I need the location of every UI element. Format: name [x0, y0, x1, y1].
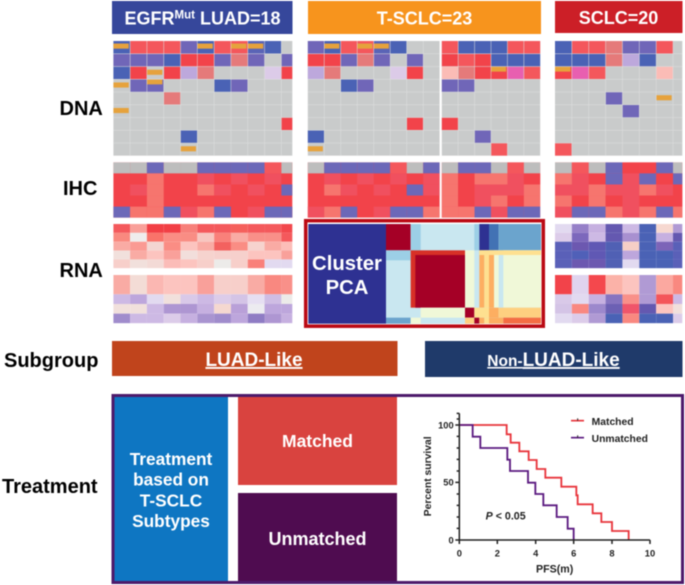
y-axis tick labels: 100 [438, 420, 454, 430]
subgroup bar: Non-LUAD-Like [425, 341, 682, 377]
subgroup bar: Non-LUAD-Like: Non-LUAD-Like [487, 350, 620, 371]
x-axis tick labels: 0 [457, 548, 462, 558]
x-axis tick labels: 2 [495, 548, 500, 558]
legend [571, 417, 648, 445]
header: SCLC: SCLC=20 [579, 8, 658, 28]
y-axis tick labels [438, 420, 454, 545]
RNA heatmap lower: EGFR LUAD [112, 274, 293, 324]
box: Treatment based on T-SCLC Subtypes: Treatment [130, 449, 213, 469]
x-axis tick labels: 4 [533, 548, 539, 558]
box: Matched [238, 397, 397, 485]
row label: Treatment: Treatment [2, 476, 98, 498]
cluster heatmap [386, 224, 541, 324]
header: T-SCLC: T-SCLC=23 [377, 8, 472, 28]
subgroup bar: LUAD-Like: LUAD-Like [205, 350, 303, 371]
header: EGFR Mut LUAD: LUAD=18 [195, 8, 280, 28]
x-axis tick labels [457, 548, 655, 558]
x-axis tick labels: 10 [645, 548, 655, 558]
y-axis title: Percent survival [423, 436, 434, 516]
header: T-SCLC [308, 1, 541, 34]
box: Treatment based on T-SCLC Subtypes [114, 397, 228, 581]
box: Unmatched [238, 493, 397, 581]
box: Treatment based on T-SCLC Subtypes: based on [133, 470, 209, 490]
header: SCLC [555, 1, 682, 33]
x-axis tick labels: 8 [609, 548, 615, 558]
box: Matched: Matched [282, 431, 353, 451]
DNA heatmap: T-SCLC right [441, 40, 541, 156]
IHC heatmap: T-SCLC left [306, 162, 440, 218]
row label: Subgroup: Subgroup [4, 350, 98, 372]
panel: Treatment [113, 396, 682, 582]
y-axis tick labels: 0 [448, 535, 454, 545]
label: Cluster PCA: Cluster [312, 253, 382, 275]
subgroup bar: LUAD-Like [112, 341, 398, 376]
IHC heatmap: T-SCLC right [441, 162, 542, 218]
curve: Unmatched [459, 425, 574, 540]
DNA heatmap: EGFR LUAD [112, 40, 294, 156]
x-axis title: PFS(m) [536, 563, 574, 575]
chart: PFS survival curves [423, 413, 655, 575]
panel: Cluster PCA [306, 221, 543, 326]
IHC heatmap: SCLC [554, 162, 684, 218]
header: EGFR Mut LUAD: EGFR [125, 8, 175, 28]
DNA heatmap: T-SCLC left [307, 40, 440, 156]
label: Cluster PCA [308, 224, 386, 324]
row label: DNA: DNA [60, 98, 103, 120]
RNA heatmap upper: SCLC [554, 223, 683, 269]
RNA heatmap lower: SCLC [554, 274, 683, 324]
row label: IHC: IHC [63, 178, 97, 200]
y-axis tick labels: 50 [443, 478, 454, 488]
legend: Unmatched [592, 434, 648, 445]
DNA heatmap: SCLC [554, 40, 683, 156]
box: Unmatched: Unmatched [268, 529, 367, 549]
box: Treatment based on T-SCLC Subtypes: T-SCLC [140, 490, 202, 510]
box: Treatment based on T-SCLC Subtypes: Subtypes [132, 511, 210, 531]
label: Cluster PCA: PCA [326, 277, 369, 299]
legend: Matched [592, 417, 634, 428]
RNA heatmap upper: EGFR LUAD [112, 223, 294, 269]
IHC heatmap: EGFR LUAD [112, 162, 294, 218]
header: EGFR Mut LUAD: Mut [175, 10, 195, 22]
p value: P < 0.05 [486, 510, 526, 522]
row label: RNA: RNA [60, 260, 103, 282]
header: EGFR Mut LUAD [112, 1, 292, 34]
curve: Matched [459, 425, 629, 540]
axes and ticks [455, 413, 650, 544]
x-axis tick labels: 6 [571, 548, 576, 558]
